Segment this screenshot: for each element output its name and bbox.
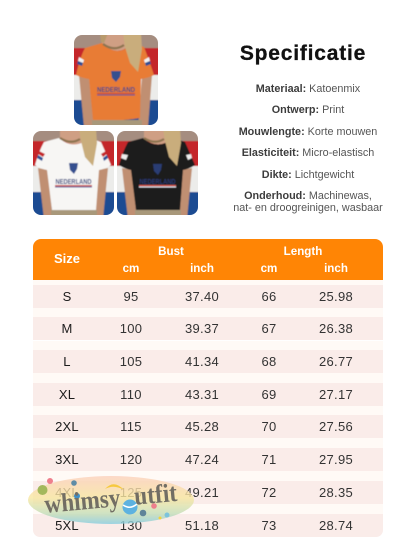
photo: orange t-shirt: NEDERLAND xyxy=(97,85,135,94)
photo: white t-shirt: NEDERLAND xyxy=(56,177,92,186)
row 4XL: 72 xyxy=(261,485,277,500)
row 2XL xyxy=(33,415,383,438)
row 2XL: 45.28 xyxy=(185,419,219,434)
row S xyxy=(33,285,383,308)
photo: white t-shirt xyxy=(33,131,114,215)
row S: 25.98 xyxy=(319,289,353,304)
size table xyxy=(33,239,383,537)
row M: M xyxy=(61,321,73,336)
row S: 95 xyxy=(123,289,139,304)
photo: black t-shirt xyxy=(117,131,198,215)
header: length inch: inch xyxy=(324,262,348,275)
spec: care xyxy=(233,190,383,214)
spec: care: nat- en droogreinigen, wasbaar xyxy=(233,202,383,214)
row L: 26.77 xyxy=(319,354,353,369)
row L: 68 xyxy=(261,354,277,369)
row 4XL: 49.21 xyxy=(185,485,219,500)
row 5XL: 28.74 xyxy=(319,518,353,533)
row S: S xyxy=(63,289,71,304)
header: bust inch: inch xyxy=(190,262,214,275)
row 4XL: 4XL xyxy=(55,485,79,500)
photo: orange t-shirt xyxy=(72,33,160,127)
row 5XL: 130 xyxy=(120,518,142,533)
row 5XL: 5XL xyxy=(55,518,79,533)
title: Specificatie xyxy=(240,42,366,65)
row XL: 43.31 xyxy=(185,387,219,402)
row 4XL: 28.35 xyxy=(319,485,353,500)
row 4XL: 125 xyxy=(120,485,142,500)
row 3XL: 27.95 xyxy=(319,452,353,467)
watermark text: whimsy xyxy=(43,483,121,519)
row M: 67 xyxy=(261,321,277,336)
row 4XL xyxy=(33,481,383,504)
header: length: Length xyxy=(284,245,322,258)
row 3XL: 3XL xyxy=(55,452,79,467)
row S: 37.40 xyxy=(185,289,219,304)
specification list xyxy=(233,83,383,214)
photo: black t-shirt: NEDERLAND xyxy=(140,177,176,186)
header: length cm: cm xyxy=(261,262,277,275)
row M: 100 xyxy=(120,321,142,336)
header: size: Size xyxy=(54,251,80,266)
row 3XL: 71 xyxy=(261,452,277,467)
row 2XL: 115 xyxy=(120,419,142,434)
watermark bubbles xyxy=(38,478,170,520)
row L: 105 xyxy=(120,354,142,369)
table header xyxy=(33,239,383,280)
row M: 26.38 xyxy=(319,321,353,336)
spec: care: Onderhoud: Machinewas, xyxy=(244,190,372,202)
row 5XL: 73 xyxy=(261,518,277,533)
row 5XL: 51.18 xyxy=(185,518,219,533)
watermark text: utfit xyxy=(133,478,179,511)
spec: design: Ontwerp: Print xyxy=(272,104,344,116)
spec: thickness: Dikte: Lichtgewicht xyxy=(262,169,354,181)
header: bust: Bust xyxy=(158,245,184,258)
spec: elasticity: Elasticiteit: Micro-elastisch xyxy=(242,147,374,159)
row 3XL: 47.24 xyxy=(185,452,219,467)
row 2XL: 2XL xyxy=(55,419,79,434)
watermark ellipse xyxy=(28,476,194,524)
row M xyxy=(33,317,383,340)
row XL: 27.17 xyxy=(319,387,353,402)
row 5XL xyxy=(33,514,383,537)
row L: L xyxy=(63,354,71,369)
row XL: XL xyxy=(59,387,75,402)
header: bust cm: cm xyxy=(123,262,139,275)
row M: 39.37 xyxy=(185,321,219,336)
watermark: whimsy outfit xyxy=(28,476,194,524)
row 3XL: 120 xyxy=(120,452,142,467)
watermark text xyxy=(43,478,179,519)
spec: sleeve length: Mouwlengte: Korte mouwen xyxy=(239,126,377,138)
row XL xyxy=(33,383,383,406)
row 2XL: 70 xyxy=(261,419,277,434)
row 2XL: 27.56 xyxy=(319,419,353,434)
spec: material: Materiaal: Katoenmix xyxy=(256,83,360,95)
row 3XL xyxy=(33,448,383,471)
product photos xyxy=(33,35,198,215)
row S: 66 xyxy=(261,289,277,304)
row L xyxy=(33,350,383,373)
row L: 41.34 xyxy=(185,354,219,369)
row XL: 69 xyxy=(261,387,277,402)
row XL: 110 xyxy=(120,387,142,402)
